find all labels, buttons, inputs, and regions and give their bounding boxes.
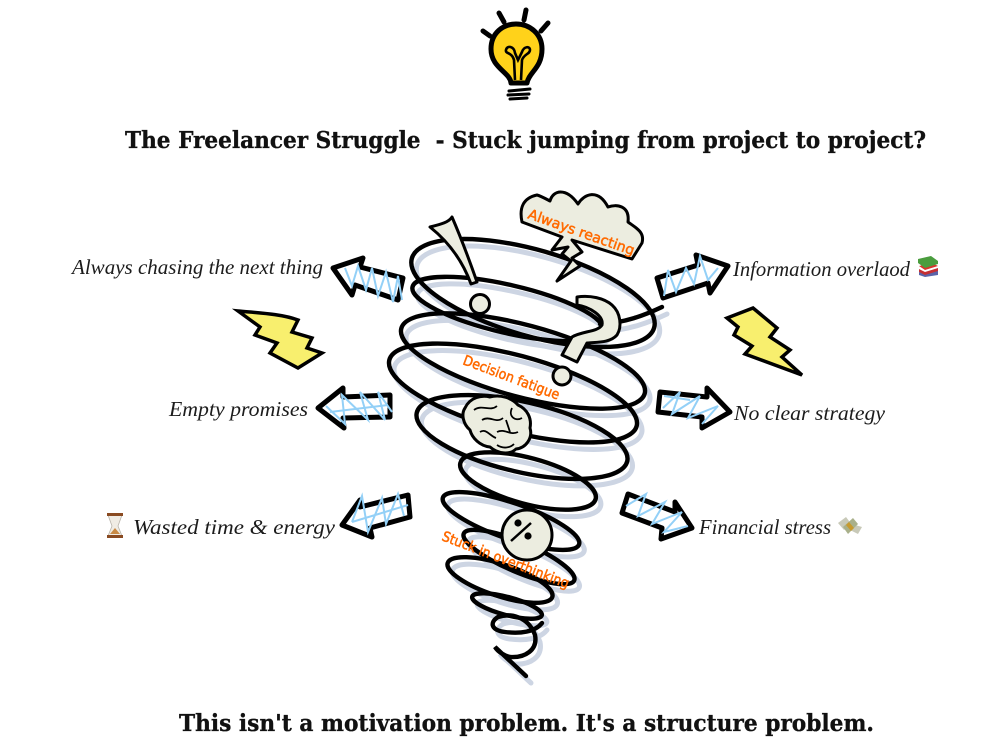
icon: exclamation mark [430,217,490,314]
arrow: information overload [657,255,728,298]
label: always reacting: Always reacting [526,207,637,259]
text: financial stress: Financial stress [698,515,831,539]
text: empty promises: Empty promises [168,397,308,421]
icon: light bulb [483,10,548,99]
footer statement: This isn't a motivation problem. It's a structure problem. [179,709,874,737]
icon: left lightning bolt [238,311,322,368]
text: always chasing the next thing: Always chasing the next thing [70,255,323,279]
label: decision fatigue: Decision fatigue [461,353,562,403]
label: stuck in overthinking: Stuck in overthinking [440,529,571,592]
spiral line [380,217,666,676]
icon: right lightning bolt [727,308,802,375]
arrow: always chasing [333,258,403,302]
icon: hourglass [107,513,123,538]
icon: percent face [502,510,552,560]
spiral shadow [385,224,671,683]
arrow: no clear strategy [658,388,730,428]
arrow: financial stress [622,494,692,539]
title: The Freelancer Struggle - Stuck jumping from project to project? [125,126,926,154]
arrow: wasted time [342,494,410,537]
text: wasted time and energy: Wasted time & energy [133,515,336,539]
icon: question mark [553,296,620,385]
icon: brain [463,396,531,453]
text: no clear strategy: No clear strategy [733,401,886,425]
icon: speech cloud [521,192,643,281]
text: information overload: Information overlaod [732,257,910,281]
icon: money with wings [838,517,862,534]
arrow: empty promises [318,388,392,428]
chart: tornado spiral [380,217,671,683]
icon: books [918,256,938,277]
